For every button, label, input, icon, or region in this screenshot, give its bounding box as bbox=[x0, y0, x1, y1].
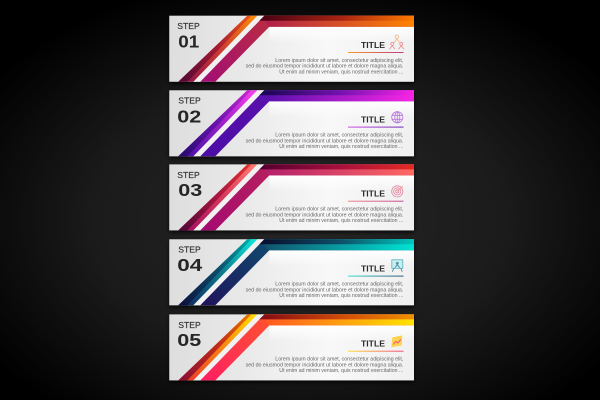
panel: step 05 bbox=[169, 314, 414, 380]
icon: people pyramid bbox=[390, 35, 404, 49]
body text: Lorem ipsum dolor sit amet, consectetur adipiscing elit, bbox=[275, 282, 404, 288]
body text: Lorem ipsum dolor sit amet, consectetur adipiscing elit, bbox=[275, 133, 404, 139]
panel: step 02 bbox=[169, 90, 414, 156]
step label: STEP bbox=[177, 170, 200, 180]
diagonal stripes and top band bbox=[178, 164, 414, 230]
body text: Ut enim ad minim veniam, quis nostrud exercitation ... bbox=[279, 144, 403, 150]
icon: presentation board bbox=[392, 260, 403, 272]
body text bbox=[246, 357, 404, 374]
step label: STEP bbox=[177, 21, 200, 31]
diagonal stripes and top band bbox=[178, 314, 414, 380]
step label: STEP bbox=[178, 96, 201, 106]
diagonal stripes and top band bbox=[178, 16, 414, 82]
body text: Ut enim ad minim veniam, quis nostrud exercitation ... bbox=[279, 368, 403, 374]
title: TITLE bbox=[361, 190, 386, 199]
step label: STEP bbox=[178, 245, 201, 255]
title: TITLE bbox=[361, 265, 386, 274]
body text: Ut enim ad minim veniam, quis nostrud exercitation ... bbox=[279, 69, 403, 75]
body text bbox=[246, 58, 404, 75]
icon: globe bbox=[392, 112, 403, 123]
step number: 05 bbox=[177, 330, 202, 350]
step number: 01 bbox=[178, 32, 200, 52]
title: TITLE bbox=[361, 116, 386, 125]
title underline bbox=[348, 201, 404, 202]
icon: target bbox=[392, 186, 403, 197]
step number: 04 bbox=[177, 255, 203, 275]
body text bbox=[246, 207, 404, 224]
body text: Lorem ipsum dolor sit amet, consectetur adipiscing elit, bbox=[275, 207, 404, 213]
title: TITLE bbox=[361, 340, 386, 349]
step number: 02 bbox=[177, 106, 202, 126]
body text bbox=[246, 133, 404, 150]
panel: step 01 bbox=[169, 16, 414, 82]
title underline bbox=[348, 52, 404, 53]
body text: sed do eiusmod tempor incididunt ut labore et dolore magna aliqua. bbox=[246, 212, 403, 218]
body text: Ut enim ad minim veniam, quis nostrud exercitation ... bbox=[279, 293, 403, 299]
body text: Ut enim ad minim veniam, quis nostrud exercitation ... bbox=[279, 218, 403, 224]
body text: sed do eiusmod tempor incididunt ut labore et dolore magna aliqua. bbox=[246, 64, 403, 70]
diagonal stripes and top band bbox=[178, 90, 414, 156]
panel: step 03 bbox=[169, 164, 414, 230]
step label: STEP bbox=[178, 320, 201, 330]
body text: sed do eiusmod tempor incididunt ut labore et dolore magna aliqua. bbox=[246, 138, 403, 144]
body text: Lorem ipsum dolor sit amet, consectetur adipiscing elit, bbox=[275, 357, 404, 363]
panel: step 04 bbox=[169, 239, 414, 305]
title underline bbox=[348, 127, 404, 128]
body text: Lorem ipsum dolor sit amet, consectetur adipiscing elit, bbox=[275, 58, 404, 64]
body text: sed do eiusmod tempor incididunt ut labore et dolore magna aliqua. bbox=[246, 287, 403, 293]
step number: 03 bbox=[178, 180, 203, 200]
body text: sed do eiusmod tempor incididunt ut labore et dolore magna aliqua. bbox=[246, 362, 403, 368]
diagonal stripes and top band bbox=[178, 239, 414, 305]
title underline bbox=[348, 351, 404, 352]
body text bbox=[246, 282, 404, 299]
title: TITLE bbox=[361, 41, 386, 50]
title underline bbox=[348, 276, 404, 277]
icon: chart card bbox=[391, 335, 402, 347]
